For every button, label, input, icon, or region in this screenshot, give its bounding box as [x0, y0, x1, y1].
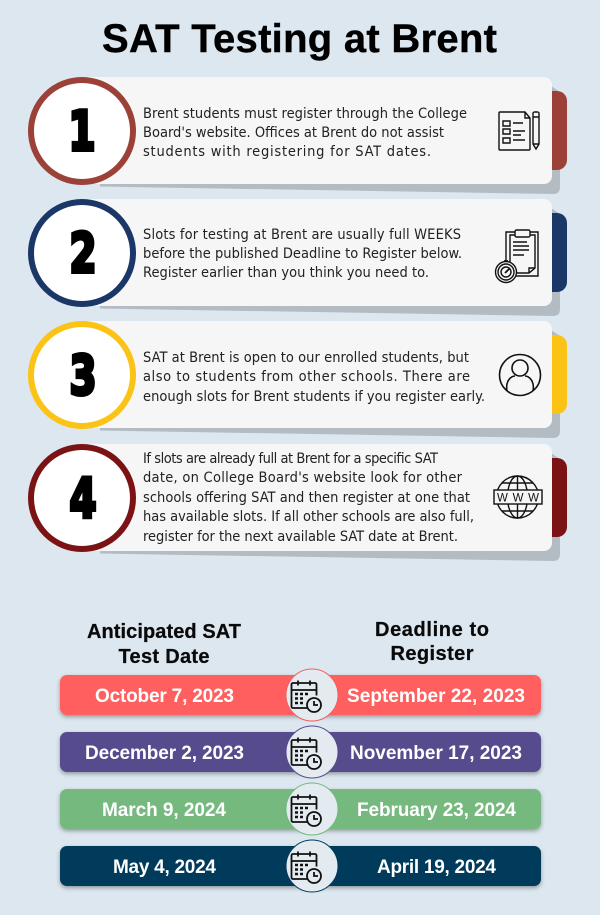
tab: step 2: [552, 213, 567, 292]
date row 3: March 9, 2024: [102, 800, 226, 821]
icon: calendar clock 2: [286, 726, 338, 778]
text: step 4: [143, 451, 474, 545]
panel: step 2: [31, 199, 567, 316]
icon: calendar clock 4: [286, 840, 338, 892]
icon: person: [500, 354, 540, 396]
number badge 2: 2: [69, 223, 97, 286]
date row 1: [60, 669, 541, 721]
date row 2: November 17, 2023: [350, 743, 522, 764]
text: step 2: Slots for testing at Brent are usually full WEEKS: [143, 227, 461, 243]
date row 3: [60, 783, 541, 835]
number badge 1: [31, 80, 133, 182]
text: step 3: [143, 350, 485, 405]
text: step 1: [143, 106, 467, 160]
number badge 2: [31, 202, 133, 304]
heading: deadline to register: Deadline to: [375, 619, 489, 641]
text: step 4: date, on College Board's website look for other: [143, 470, 463, 486]
text: step 4: register for the next available SAT date at Brent.: [143, 529, 458, 545]
icon: clipboard and gauge: [496, 230, 538, 282]
heading: deadline to register: Register: [390, 643, 474, 665]
panel: step 1: [31, 77, 567, 194]
date row 3: February 23, 2024: [357, 800, 516, 821]
heading: anticipated SAT test date: Anticipated SAT: [87, 621, 241, 643]
date row 4: [60, 840, 541, 892]
icon: calendar clock 1: [286, 669, 338, 721]
tab: step 1: [552, 91, 567, 170]
date row 4: April 19, 2024: [377, 857, 496, 878]
text: step 4: has available slots. If all other schools are also full,: [143, 509, 474, 525]
text: step 3: also to students from other schools. There are: [143, 369, 470, 385]
icon: www globe: WWW: [497, 492, 539, 504]
date row 1: September 22, 2023: [347, 686, 525, 707]
text: step 4: schools offering SAT and then register at one that: [143, 490, 470, 506]
text: step 2: Register earlier than you think you need to.: [143, 265, 429, 281]
date row 1: October 7, 2023: [95, 686, 234, 707]
date row 4: May 4, 2024: [113, 857, 216, 878]
heading: anticipated SAT test date: Test Date: [118, 646, 210, 668]
title: SAT Testing at Brent: [102, 17, 497, 61]
tab: step 4: [552, 458, 567, 537]
text: step 4: If slots are already full at Brent for a specific SAT: [143, 451, 439, 467]
panel: step 4: [31, 444, 567, 561]
icon: www globe: [494, 476, 542, 518]
number badge 3: 3: [69, 345, 97, 408]
number badge 3: [31, 324, 133, 426]
icon: checklist and pencil: [499, 112, 539, 150]
text: step 1: Brent students must register through the College: [143, 106, 467, 122]
text: step 3: SAT at Brent is open to our enrolled students, but: [143, 350, 469, 366]
panel: step 3: [31, 321, 567, 438]
number badge 4: 4: [69, 468, 97, 531]
number badge 4: [31, 447, 133, 549]
tab: step 3: [552, 335, 567, 414]
text: step 2: [143, 227, 462, 281]
date row 2: December 2, 2023: [85, 743, 244, 764]
date row 2: [60, 726, 541, 778]
text: step 3: enough slots for Brent students if you register early.: [143, 389, 485, 405]
number badge 1: 1: [68, 101, 96, 164]
text: step 2: before the published Deadline to Register below.: [143, 246, 462, 262]
icon: calendar clock 3: [286, 783, 338, 835]
text: step 1: students with registering for SAT dates.: [143, 144, 431, 160]
text: step 1: Board's website. Offices at Brent do not assist: [143, 125, 444, 141]
